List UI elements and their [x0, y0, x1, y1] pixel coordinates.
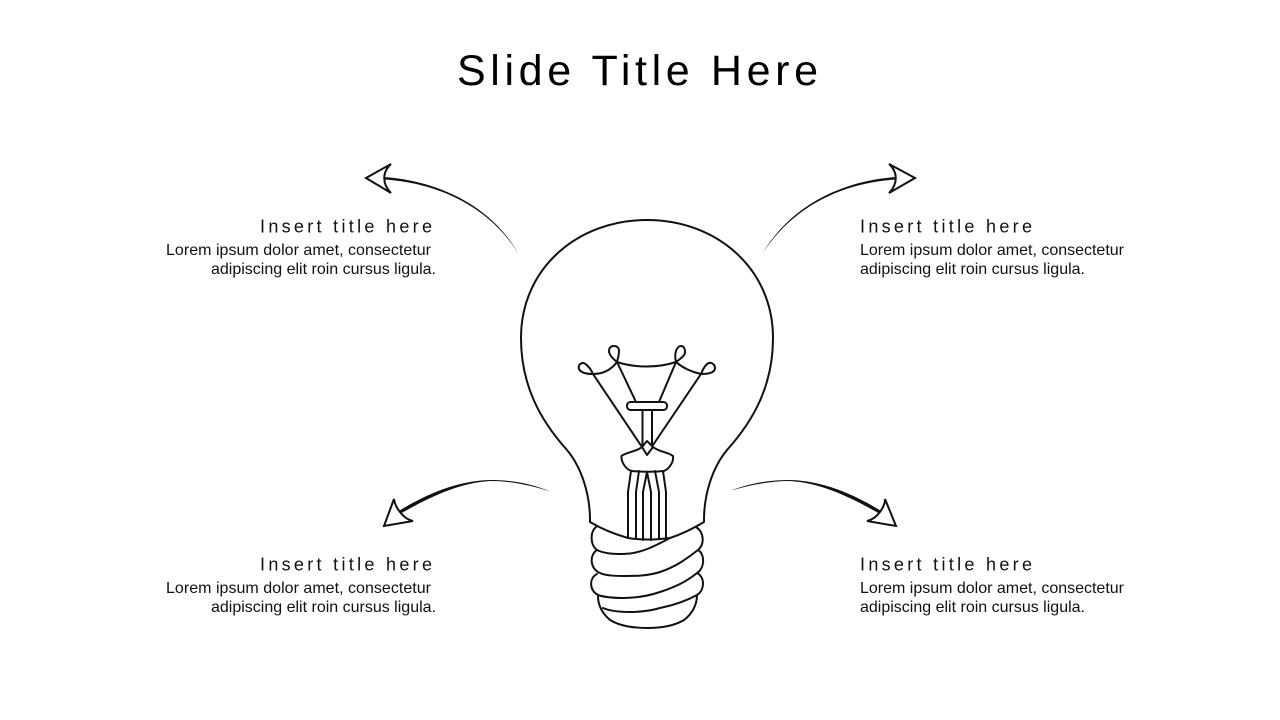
text block: bottom right: Lorem ipsum dolor amet, consectetur: [860, 580, 1125, 597]
text block: bottom left: Lorem ipsum dolor amet, consectetur: [166, 580, 432, 597]
text block: bottom right: adipiscing elit roin cursus ligula.: [860, 599, 1085, 616]
text block: bottom left: [166, 554, 436, 616]
arrow: top left: [366, 164, 518, 253]
text block: bottom right: Insert title here: [860, 554, 1032, 574]
text block: top left: Insert title here: [260, 216, 432, 236]
bulb glass outline: [521, 220, 773, 540]
text block: top right: Insert title here: [860, 216, 1032, 236]
support wires: [628, 471, 666, 540]
text block: bottom right: [860, 554, 1125, 616]
screw base: [591, 527, 703, 628]
text block: top right: Lorem ipsum dolor amet, consectetur: [860, 242, 1125, 259]
icon: light bulb: [521, 220, 773, 628]
arrow: bottom left: [384, 480, 550, 526]
filament: [579, 346, 715, 455]
text block: top left: [166, 216, 436, 278]
text block: bottom left: adipiscing elit roin cursus ligula.: [211, 599, 436, 616]
filament base: [621, 447, 673, 472]
arrow: bottom right: [731, 480, 896, 526]
title: Slide Title Here: [457, 47, 818, 95]
arrow: top right: [763, 164, 915, 253]
text block: top right: [860, 216, 1125, 278]
text block: bottom left: Insert title here: [260, 554, 432, 574]
text block: top left: adipiscing elit roin cursus ligula.: [211, 261, 436, 278]
text block: top left: Lorem ipsum dolor amet, consectetur: [166, 242, 432, 259]
text block: top right: adipiscing elit roin cursus ligula.: [860, 261, 1085, 278]
